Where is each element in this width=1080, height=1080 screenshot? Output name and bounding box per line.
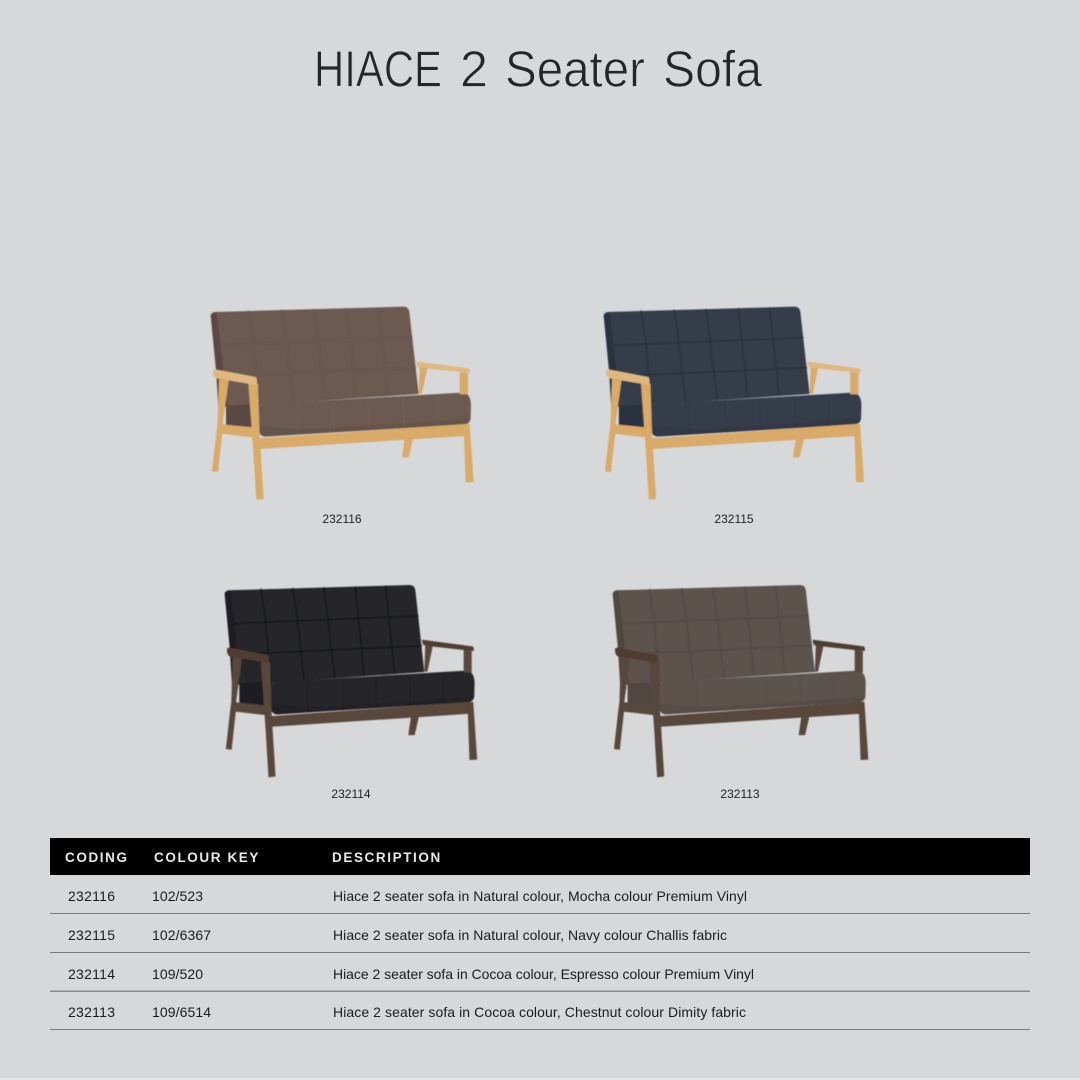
table row 232113: Hiace 2 seater sofa in Cocoa colour, Chestnut colour Dimity fabric [333,1004,746,1020]
table row 232113: 109/6514 [152,1004,211,1020]
table row 232114: 232114 [68,966,115,982]
product: sofa 232113 chestnut fabric, cocoa frame [613,585,868,777]
table row 232116: Hiace 2 seater sofa in Natural colour, Mocha colour Premium Vinyl [333,888,747,904]
sofa back cushion [604,307,810,407]
sofa back cushion [613,585,815,685]
sofa wooden frame [605,362,864,499]
sofa wooden frame [226,640,477,777]
sofa seat cushion [226,393,471,437]
title: 2 [460,40,488,98]
sofa back cushion [225,585,424,685]
table row 232115: Hiace 2 seater sofa in Natural colour, Navy colour Challis fabric [333,927,727,943]
caption: 232114: 232114 [331,787,371,801]
table row 232115 [68,927,727,943]
title: HIACE [314,40,442,98]
table row 232115: 102/6367 [152,927,211,943]
table row 232116: 232116 [68,888,115,904]
table header [50,838,1030,875]
caption: 232113: 232113 [720,787,760,801]
table [50,838,1030,1030]
title: Sofa [663,40,763,98]
table row 232114: Hiace 2 seater sofa in Cocoa colour, Espresso colour Premium Vinyl [333,966,754,982]
table row 232114: 109/520 [152,966,203,982]
table row 232113: 232113 [68,1004,115,1020]
caption: 232116: 232116 [322,512,362,526]
caption: 232115: 232115 [714,512,754,526]
product: sofa 232116 mocha vinyl, natural frame [211,307,473,499]
title: Seater [505,40,645,98]
table header: CODING [65,850,129,865]
product: sofa 232115 navy fabric, natural frame [604,307,864,499]
sofa wooden frame [614,640,868,777]
product: sofa 232114 espresso vinyl, cocoa frame [225,585,477,777]
sofa seat cushion [619,393,861,437]
table row 232116 [68,888,747,904]
title [314,40,763,98]
table row 232116: 102/523 [152,888,203,904]
sofa seat cushion [239,671,475,714]
table row 232114 [68,966,754,982]
table header: DESCRIPTION [332,850,442,865]
table row 232113 [68,1004,746,1020]
sofa seat cushion [628,671,866,714]
sofa wooden frame [212,362,473,499]
table header: COLOUR KEY [154,850,260,865]
sofa back cushion [211,307,419,407]
table row 232115: 232115 [68,927,115,943]
